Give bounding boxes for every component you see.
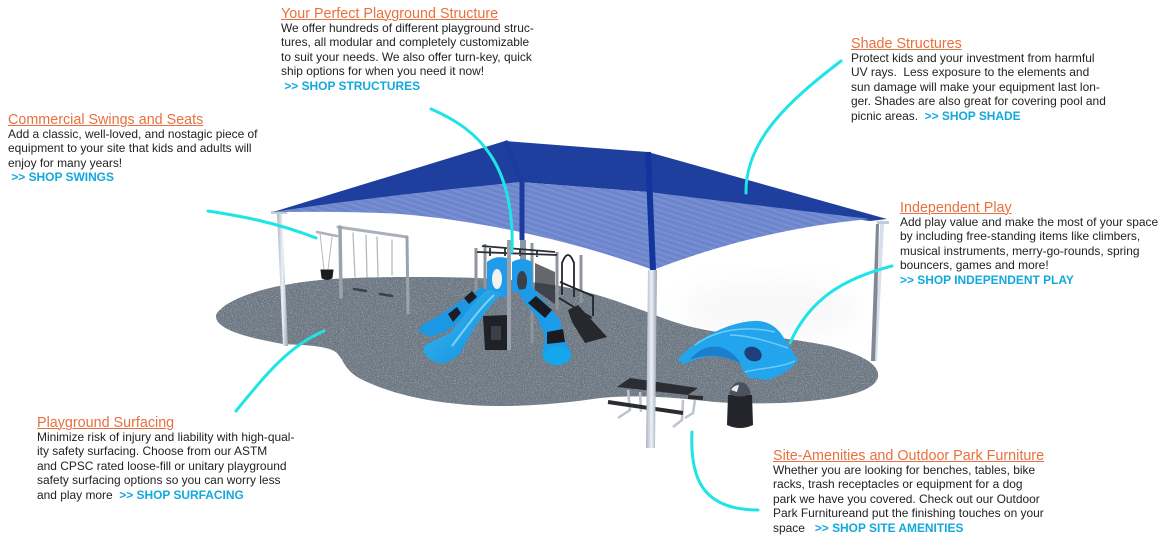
text block: independent play: >> SHOP INDEPENDENT PLAY [900, 273, 1074, 287]
arrow: site amenities [692, 432, 758, 510]
back left slide [418, 287, 490, 337]
text block: surfacing: and CPSC rated loose-fill or unitary playground [37, 459, 286, 473]
text block: independent play [900, 200, 1158, 287]
arrow: structures [431, 109, 512, 252]
arrow: swings [208, 211, 316, 238]
text block: shade: UV rays. Less exposure to the elements and [851, 65, 1089, 79]
text block: shade: Protect kids and your investment from harmful [851, 51, 1094, 65]
text block: swings: enjoy for many years! [8, 156, 122, 170]
picnic table [608, 378, 703, 427]
text block: swings [8, 112, 258, 184]
back post [520, 240, 526, 270]
arrow: surfacing [236, 331, 324, 411]
text block: playground structure [281, 6, 534, 93]
heading: shade: Shade Structures [851, 36, 962, 52]
text block: surfacing: ity safety surfacing. Choose from our ASTM [37, 444, 267, 458]
heading: swings: Commercial Swings and Seats [8, 112, 203, 128]
text block: independent play: bouncers, games and more! [900, 258, 1049, 272]
text block: independent play: by including free-standing items like climbers, [900, 229, 1140, 243]
text block: site amenities [773, 448, 1044, 535]
text block: surfacing: and play more >> SHOP SURFACING [37, 488, 244, 502]
heading: playground structure: Your Perfect Playground Structure [281, 6, 498, 22]
text block: independent play: Add play value and make the most of your space [900, 215, 1158, 229]
trash receptacle [727, 382, 753, 428]
text block: shade [851, 36, 1106, 123]
front canopy post [646, 270, 657, 448]
heading: site amenities: Site-Amenities and Outdoor Park Furniture [773, 448, 1044, 464]
text block: site amenities: space >> SHOP SITE AMENITIES [773, 521, 963, 535]
front post of structure [507, 240, 511, 350]
text block: site amenities: Park Furnitureand put the finishing touches on your [773, 506, 1044, 520]
heading: independent play: Independent Play [900, 200, 1012, 216]
independent play climber [677, 321, 798, 380]
black panel [483, 315, 508, 350]
text block: playground structure: to suit your needs. We also offer turn-key, quick [281, 50, 532, 64]
text block: shade: ger. Shades are also great for covering pool and [851, 94, 1106, 108]
text block: playground structure: >> SHOP STRUCTURES [284, 79, 420, 93]
text block: site amenities: racks, trash receptacles or equipment for a dog [773, 477, 1022, 491]
right canopy post [871, 221, 889, 361]
playground structure [418, 240, 607, 366]
text block: playground structure: We offer hundreds of different playground struc- [281, 21, 534, 35]
text block: site amenities: Whether you are looking for benches, tables, bike [773, 463, 1035, 477]
text block: surfacing: Minimize risk of injury and liability with high-qual- [37, 430, 294, 444]
text block: swings: Add a classic, well-loved, and nostagic piece of [8, 127, 258, 141]
text block: playground structure: ship options for when you need it now! [281, 64, 484, 78]
ground shadow [680, 280, 860, 340]
tube slide [517, 288, 572, 366]
text block: surfacing: safety surfacing options so you can worry less [37, 473, 281, 487]
swing set [317, 227, 408, 313]
text block: surfacing [37, 415, 294, 502]
text block: swings: equipment to your site that kids and adults will [8, 141, 252, 155]
left canopy post [271, 211, 288, 346]
black climber [568, 305, 607, 343]
front slide [423, 290, 503, 364]
arrow: shade [746, 61, 841, 193]
text block: site amenities: park we have you covered. Check out our Outdoor [773, 492, 1040, 506]
canopy shade [273, 141, 887, 270]
arrow: independent play [790, 266, 892, 343]
text block: shade: picnic areas. >> SHOP SHADE [851, 109, 1021, 123]
text block: playground structure: tures, all modular and completely customizable [281, 35, 529, 49]
text block: independent play: musical instruments, merry-go-rounds, spring [900, 244, 1140, 258]
heading: surfacing: Playground Surfacing [37, 415, 174, 431]
text block: swings: >> SHOP SWINGS [11, 170, 114, 184]
rubber surfacing [216, 277, 878, 406]
text block: shade: sun damage will make your equipment last lon- [851, 80, 1100, 94]
slide tower panels [487, 257, 533, 297]
